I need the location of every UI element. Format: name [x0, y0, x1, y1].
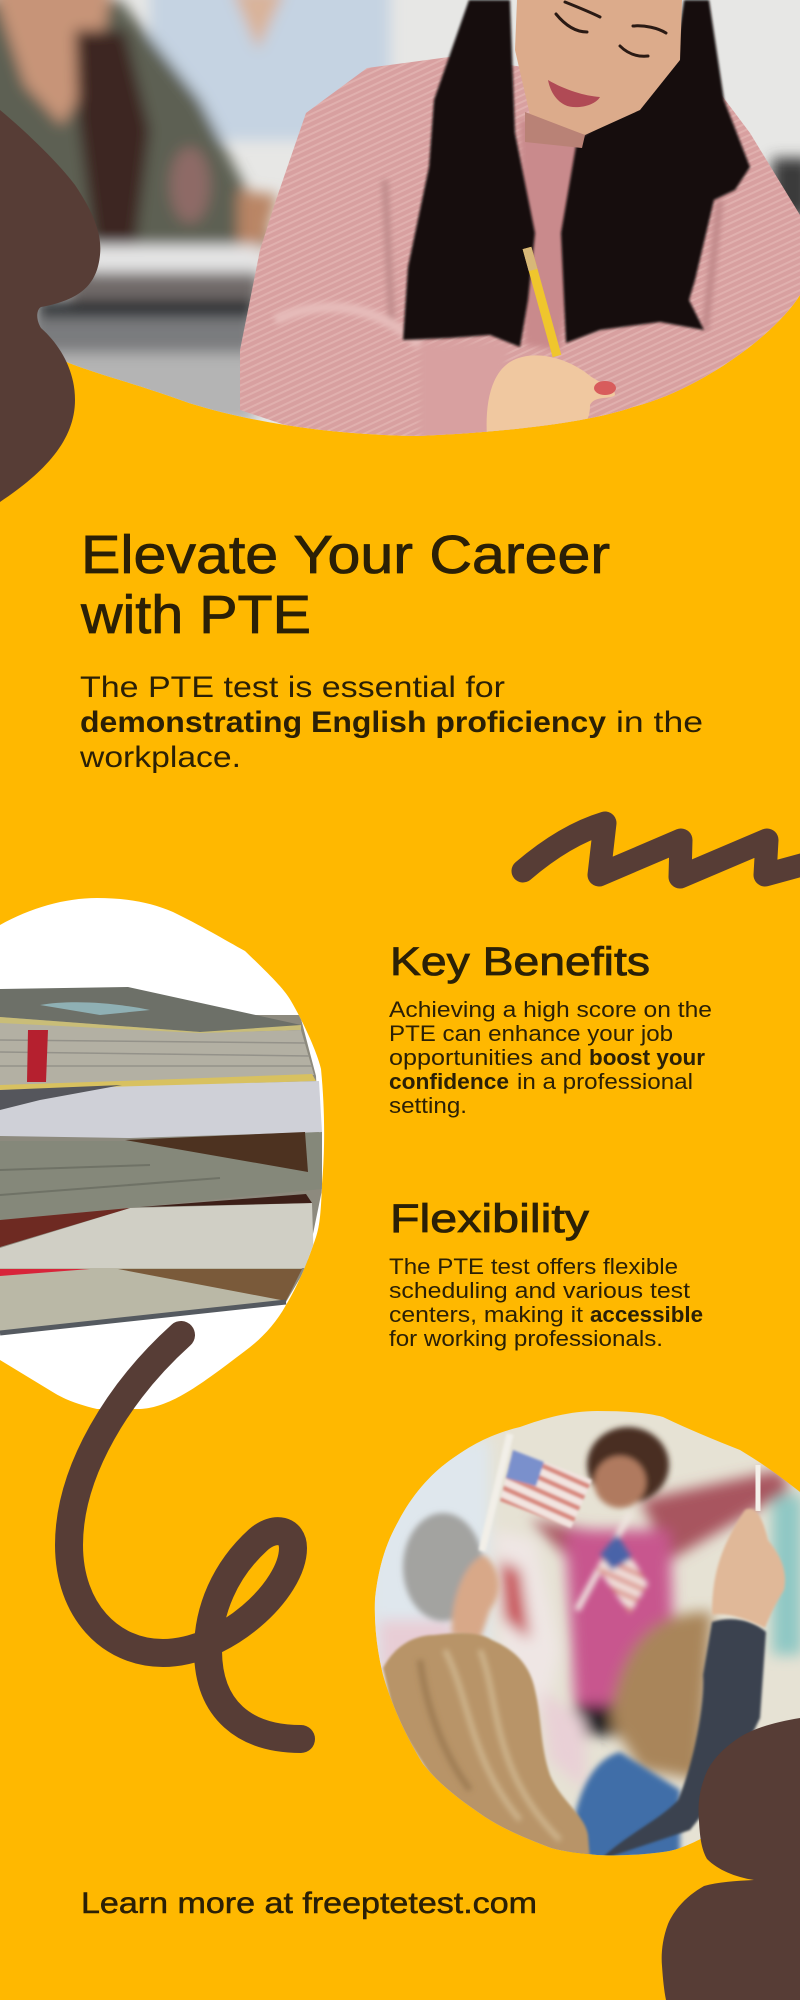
top book cover: [0, 987, 301, 1032]
intro paragraph: The PTE test is essential for: [80, 671, 505, 704]
blue shirt: [569, 1752, 680, 1860]
text block: key benefits: setting.: [389, 1093, 467, 1118]
text block: key benefits: boost your: [589, 1045, 705, 1070]
title: with PTE: [80, 585, 311, 645]
squiggle: zigzag: [523, 823, 800, 877]
text block: key benefits: PTE can enhance your job: [389, 1021, 673, 1046]
photo: classroom raising flags: [370, 1405, 800, 1860]
text block: key benefits: [389, 997, 712, 1118]
pink sweater: [240, 57, 800, 440]
pencil: [527, 248, 557, 356]
book 5: [0, 1268, 302, 1333]
footer call to action: Learn more at freeptetest.com: [81, 1887, 537, 1920]
book 4: [0, 1203, 314, 1268]
blob: bottom-right brown: [662, 1718, 800, 2000]
gray-haired head: [403, 1513, 483, 1621]
lips: [548, 80, 600, 107]
teacher head: [587, 1427, 669, 1503]
raised hand left: [452, 1555, 499, 1640]
heading: Key Benefits: Key Benefits: [390, 940, 650, 984]
intro paragraph: demonstrating English proficiency: [80, 706, 606, 739]
intro paragraph: in the: [616, 706, 703, 739]
backing between books: [0, 1015, 322, 1333]
text block: key benefits: opportunities and: [389, 1045, 582, 1070]
text block: flexibility: for working professionals.: [389, 1326, 663, 1351]
text block: key benefits: Achieving a high score on the: [389, 997, 712, 1022]
text block: flexibility: centers, making it: [389, 1302, 583, 1327]
small flag: [577, 1513, 630, 1610]
book 1 pages: [0, 1023, 314, 1086]
text block: key benefits: confidence: [389, 1069, 509, 1094]
suit arm and raised hand: [600, 1619, 766, 1860]
blonde hair: [383, 1633, 590, 1860]
blob: top-left brown: [0, 110, 100, 502]
heading: Flexibility: Flexibility: [390, 1197, 589, 1241]
text block: flexibility: scheduling and various test: [389, 1278, 690, 1303]
photo: student writing with pencil: [0, 0, 800, 440]
book 3: [143, 1132, 322, 1206]
text block: flexibility: The PTE test offers flexible: [389, 1254, 678, 1279]
title: Elevate Your Career: [81, 525, 610, 585]
squiggle: loop curl: [69, 1335, 301, 1739]
long black hair: [403, 0, 750, 347]
title: [80, 525, 610, 645]
photo: stack of books: [0, 890, 330, 1420]
text block: flexibility: [389, 1254, 703, 1351]
writing hand: [487, 355, 615, 438]
text block: key benefits: in a professional: [517, 1069, 693, 1094]
book 2: [0, 1081, 322, 1138]
large flag: [482, 1434, 592, 1551]
text block: flexibility: accessible: [590, 1302, 703, 1327]
intro paragraph: workplace.: [79, 741, 241, 774]
face: [515, 0, 682, 135]
intro paragraph: [79, 671, 703, 774]
